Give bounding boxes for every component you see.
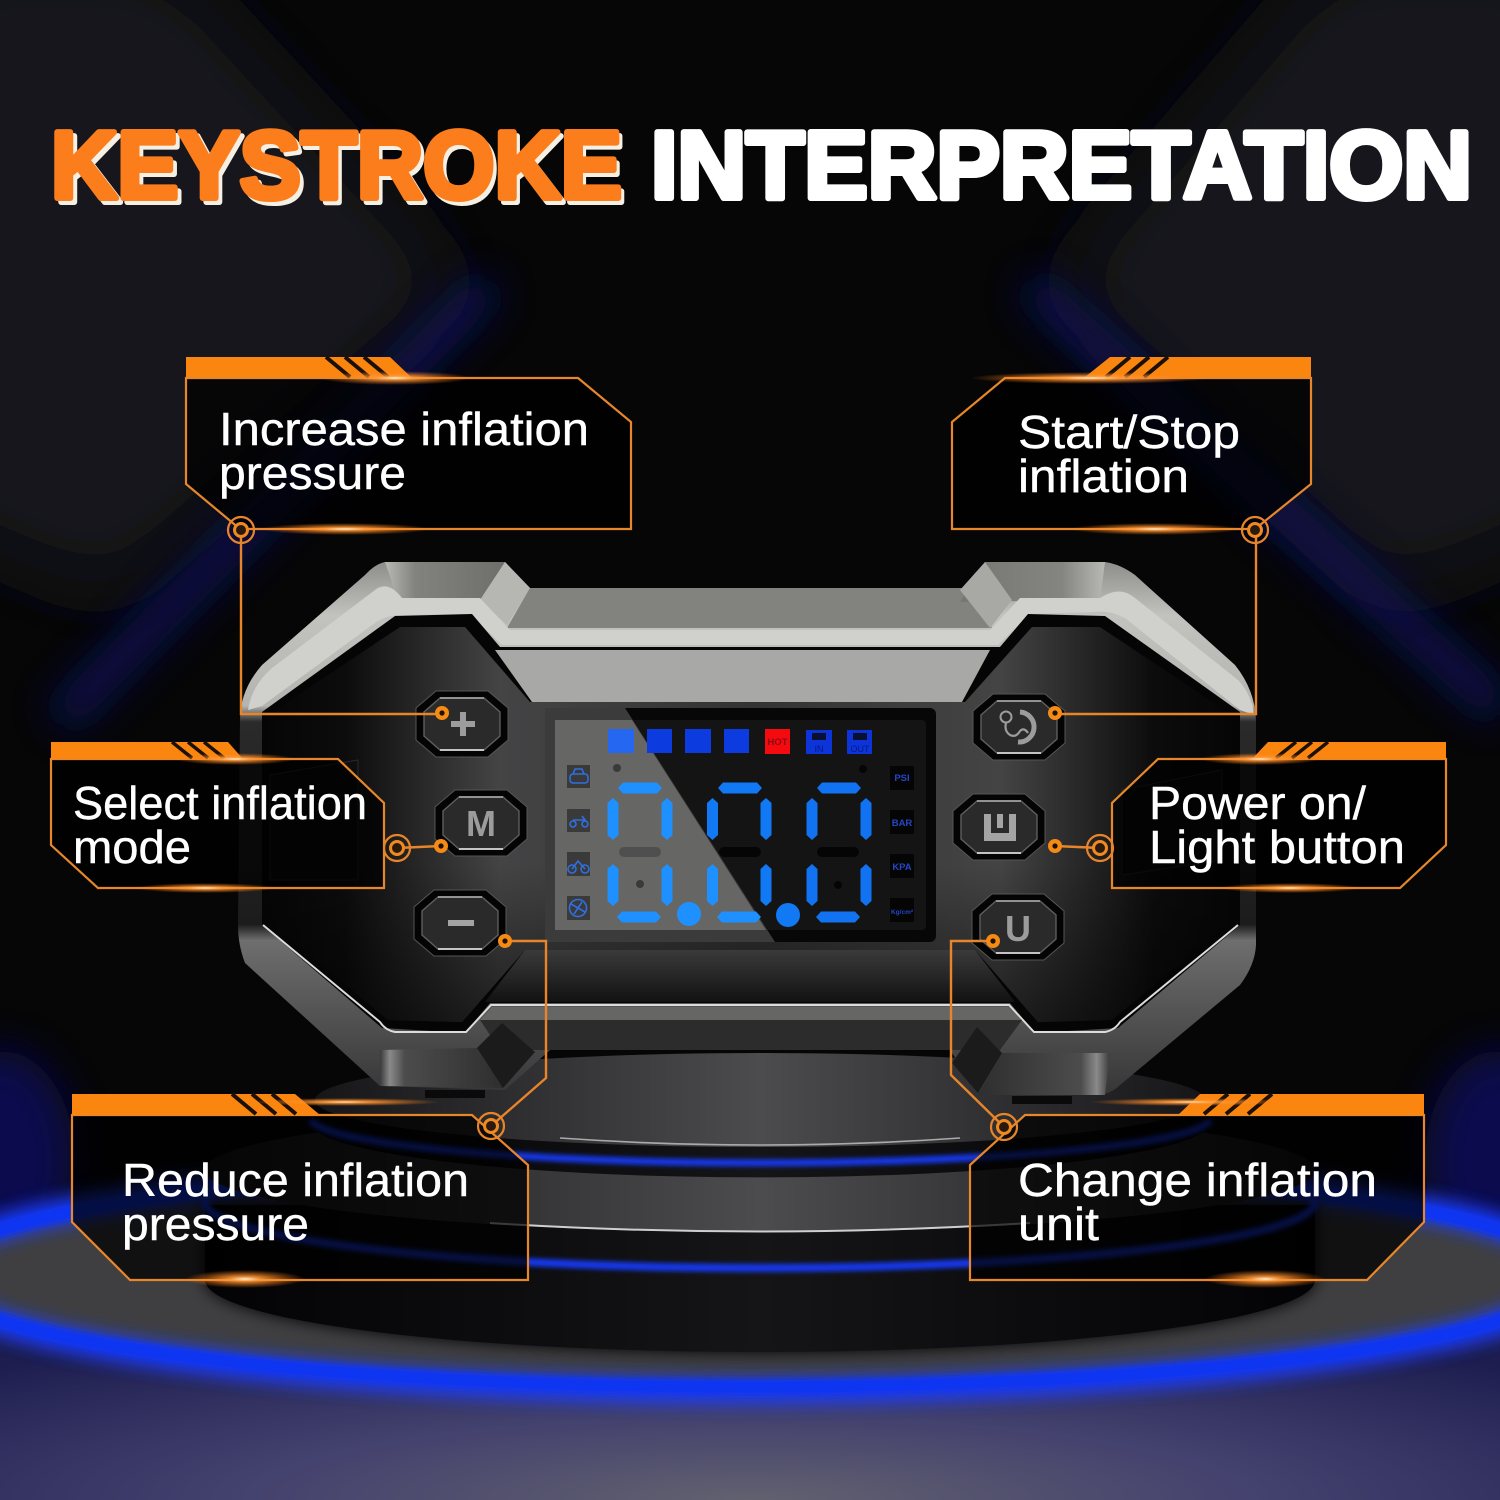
callout: power on light button	[1112, 742, 1446, 893]
title: KEYSTROKE	[51, 112, 622, 219]
title: INTERPRETATION	[651, 112, 1472, 219]
callout: power on light button: Power on/	[1149, 777, 1366, 829]
device top facets	[248, 562, 1254, 715]
callout: increase inflation pressure: pressure	[219, 447, 406, 499]
level squares	[608, 729, 749, 753]
podium upper tier	[311, 1053, 1210, 1177]
device	[238, 562, 1256, 1104]
connector: minus button	[478, 934, 546, 1139]
decimal dots	[677, 902, 800, 927]
LCD glare	[545, 708, 775, 942]
plus button	[416, 691, 508, 757]
unit labels: BAR	[892, 818, 912, 829]
HOT indicator	[765, 729, 790, 754]
unit button: U	[1005, 908, 1031, 949]
title: KEYSTROKE	[55, 116, 625, 223]
title	[51, 112, 1472, 223]
unit labels	[890, 766, 914, 922]
floor	[0, 1160, 1500, 1500]
connector: mode button	[384, 835, 448, 861]
digit one	[608, 782, 672, 922]
OUT indicator	[847, 730, 872, 754]
callout: start stop inflation: Start/Stop	[1018, 406, 1240, 458]
mode button	[435, 790, 527, 856]
device shell	[238, 562, 1256, 1095]
podium lower tier	[205, 1108, 1315, 1352]
callout: select inflation mode: mode	[73, 821, 191, 873]
mode button: M	[466, 803, 496, 844]
callout: power on light button: Light button	[1149, 821, 1405, 873]
digit two	[707, 782, 772, 922]
OUT indicator: OUT	[850, 744, 870, 754]
callout: increase inflation pressure: Increase inflation	[219, 403, 589, 455]
IN indicator: IN	[814, 744, 824, 754]
HOT indicator: HOT	[767, 737, 788, 748]
unit button	[972, 894, 1064, 960]
callout: reduce inflation pressure	[72, 1094, 528, 1288]
left side vent	[270, 760, 358, 880]
callout: start stop inflation	[952, 357, 1311, 535]
callout: select inflation mode	[51, 742, 384, 893]
callout: start stop inflation: inflation	[1018, 450, 1189, 502]
callout: reduce inflation pressure: Reduce inflation	[122, 1154, 469, 1206]
unit labels: PSI	[894, 773, 910, 784]
callout: select inflation mode: Select inflation	[73, 777, 367, 829]
LCD bezel	[545, 708, 936, 942]
blue floor ring	[0, 1159, 1500, 1391]
device face	[262, 614, 1240, 1033]
callout: change inflation unit: Change inflation	[1018, 1154, 1377, 1206]
start stop button	[973, 694, 1065, 760]
LCD inner panel	[555, 720, 926, 930]
callout: increase inflation pressure	[186, 357, 631, 535]
power button	[953, 794, 1045, 860]
unit labels: Kg/cm²	[891, 909, 914, 916]
minus button	[414, 890, 506, 956]
right side vent	[1122, 770, 1222, 875]
connector: power button	[1048, 835, 1113, 861]
LCD display	[545, 708, 936, 942]
callout: reduce inflation pressure: pressure	[122, 1198, 309, 1250]
unit labels: KPA	[892, 862, 912, 873]
digit three	[806, 782, 872, 922]
connector: unit button	[951, 934, 1017, 1140]
device lower trim	[263, 925, 1238, 1104]
callout: change inflation unit	[970, 1094, 1424, 1288]
small dots	[613, 764, 867, 889]
connector: start stop button	[1048, 517, 1268, 720]
IN indicator	[806, 730, 832, 754]
connector: plus button	[228, 517, 449, 720]
mode icons	[567, 765, 590, 920]
callout: change inflation unit: unit	[1018, 1198, 1099, 1250]
